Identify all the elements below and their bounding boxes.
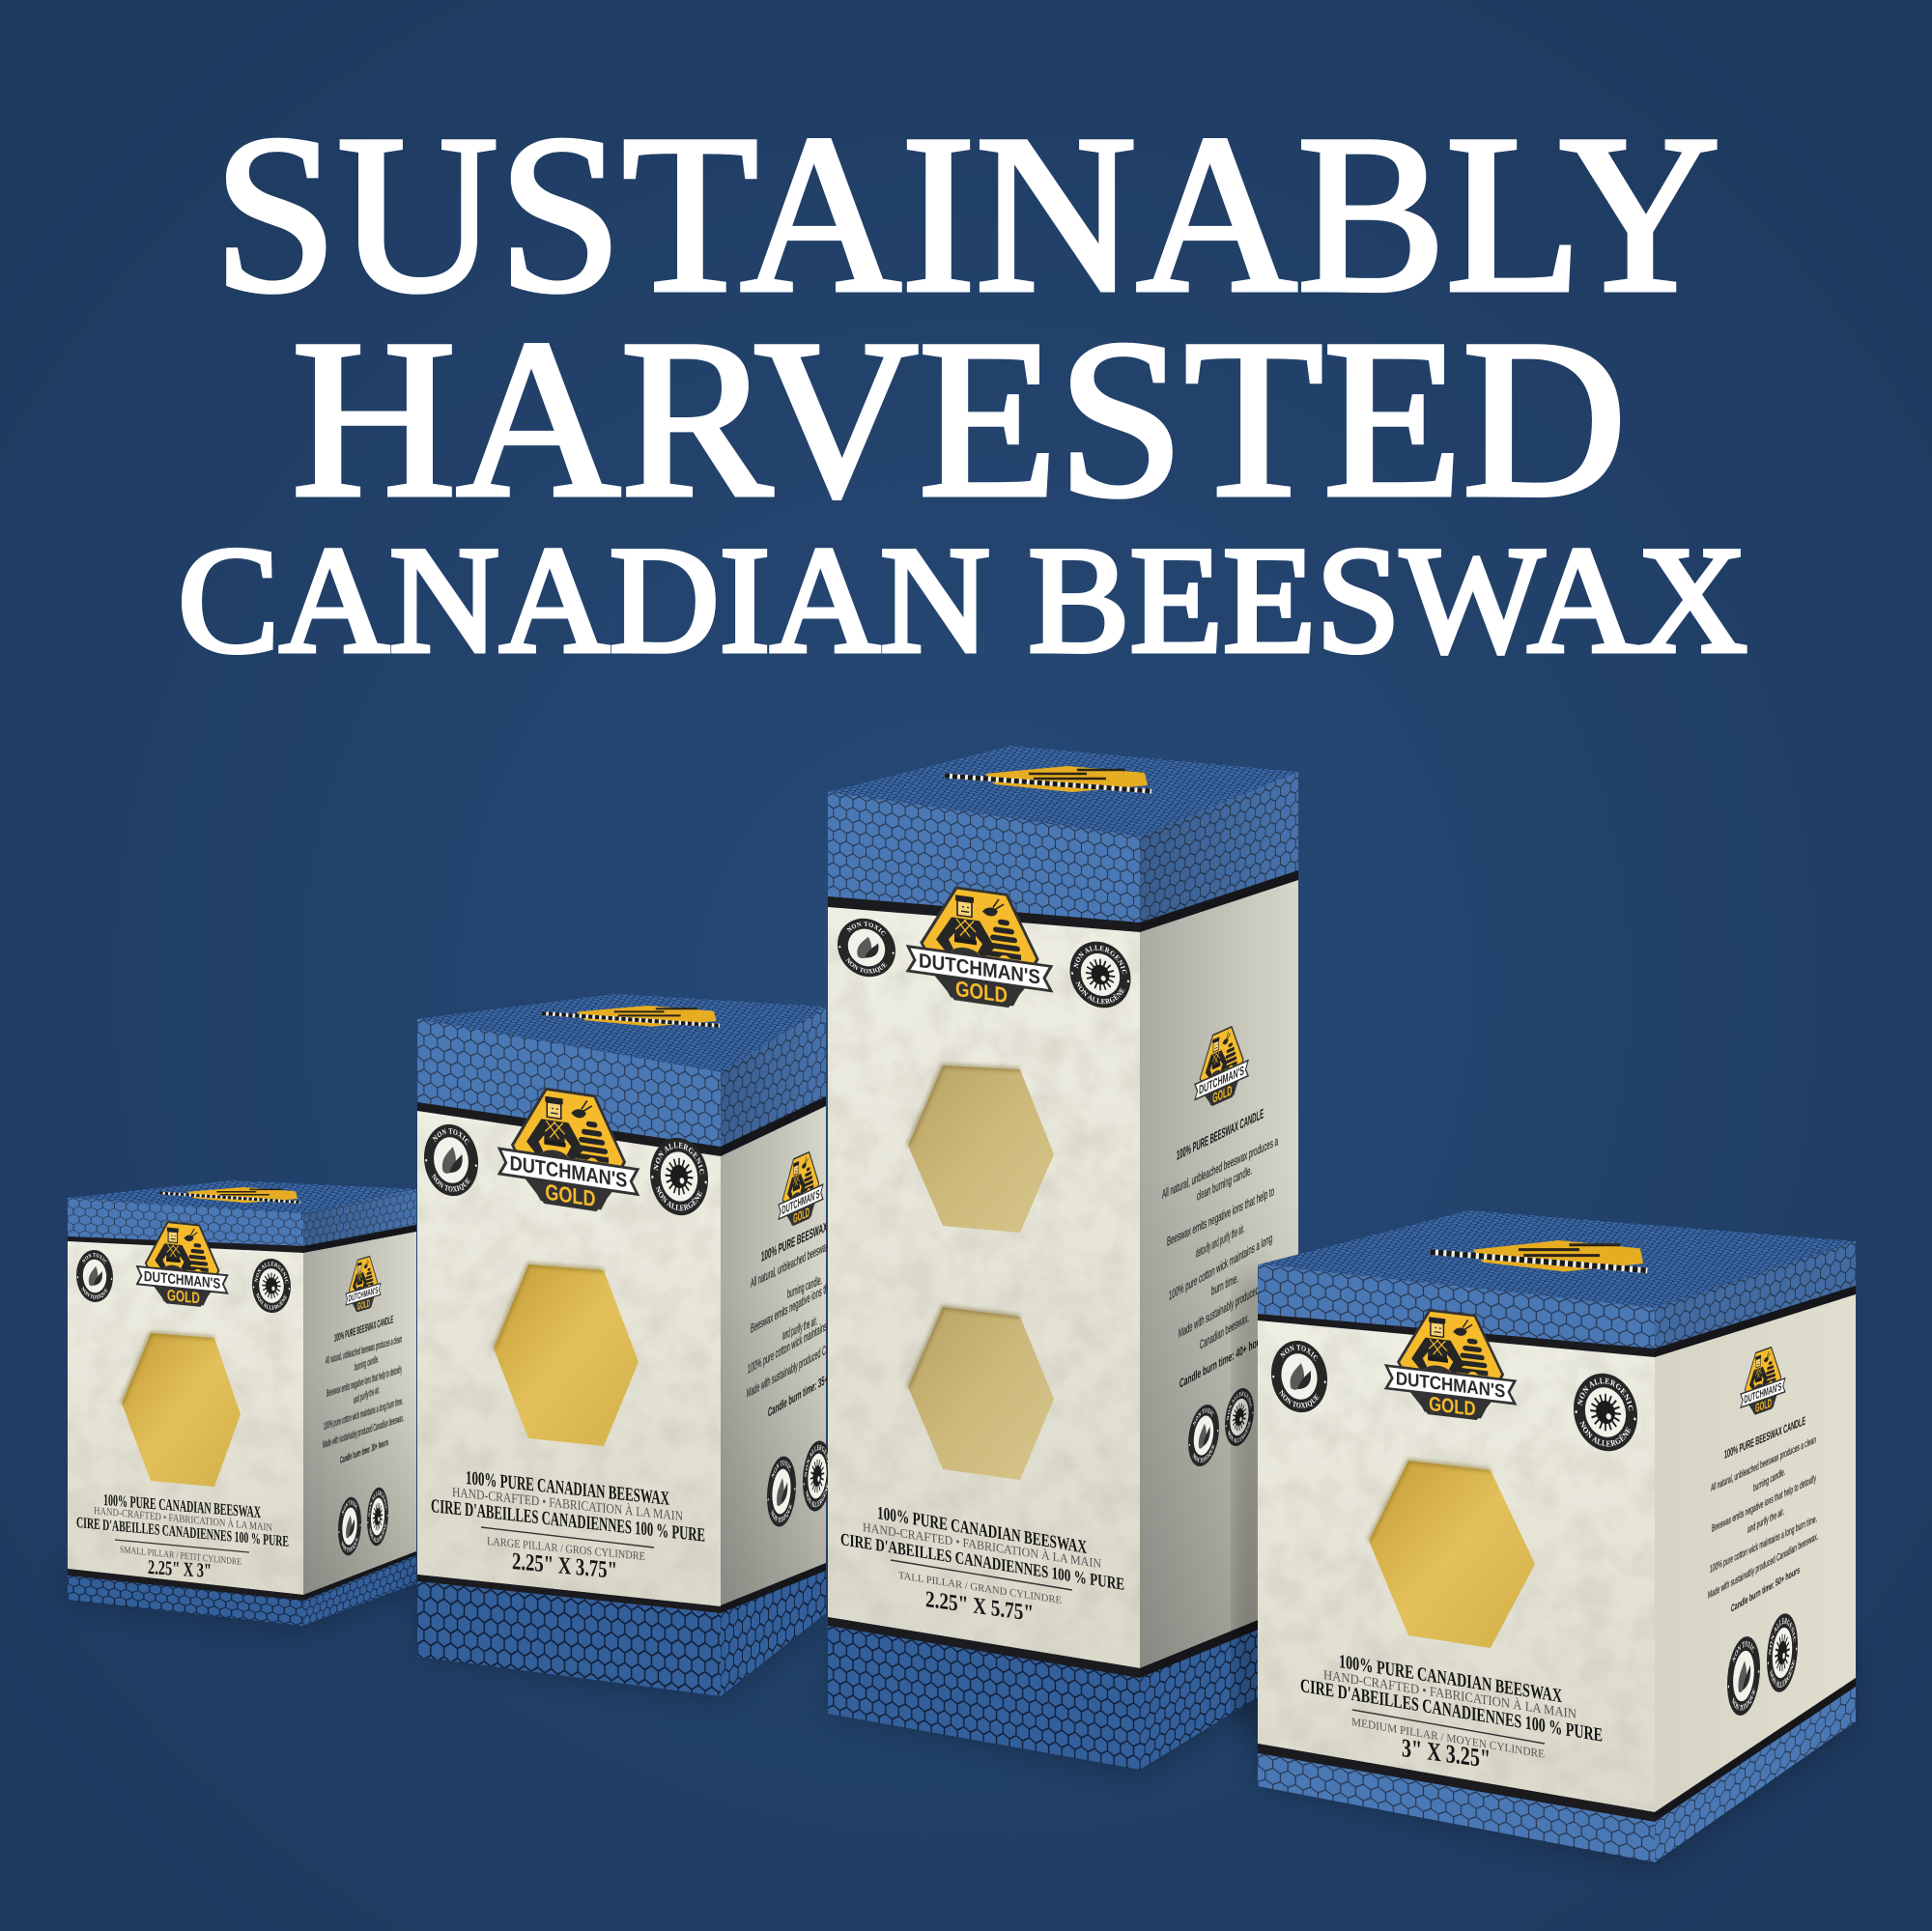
side description: detoxify and purify the air.	[1196, 1220, 1244, 1261]
logo	[908, 881, 1051, 1013]
side badge: non toxic	[338, 1493, 361, 1559]
front label text: CIRE D'ABEILLES CANADIENNES 100 % PURE	[1300, 1675, 1603, 1746]
badge: non toxic	[424, 1122, 478, 1199]
front face	[828, 792, 1140, 1770]
side logo: DUTCHMAN'S	[349, 1285, 378, 1304]
right face: Beeswax emits negative ions that help to detoxify	[1712, 1473, 1816, 1535]
heading line: harvested: HARVESTED	[292, 293, 1627, 544]
badge: non allergenic	[1574, 1370, 1637, 1455]
badge: non allergenic: NON ALLERGENIC	[255, 1262, 288, 1284]
heading line: sustainably: SUSTAINABLY	[213, 88, 1720, 339]
side description: Canadian beeswax.	[1200, 1310, 1249, 1352]
front label text: 2.25" X 3.75"	[512, 1548, 617, 1584]
icon: wax window upper	[908, 1065, 1054, 1233]
text: All natural, unbleached beeswax produces a clean	[751, 1218, 871, 1291]
box: medium pillar	[1236, 1210, 1856, 1869]
side description: 100% PURE BEESWAX CANDLE	[761, 1207, 854, 1265]
badge: non allergenic: NON ALLERGÈNE	[655, 1185, 702, 1211]
right face: All natural, unbleached beeswax produces a	[1162, 1134, 1278, 1202]
side description: burning candle.	[1753, 1466, 1785, 1494]
side badge: non allergenic: NON ALLERGÈNE	[1770, 1660, 1795, 1688]
icon: wax window	[122, 1333, 241, 1487]
side badge: non allergenic	[1767, 1606, 1798, 1699]
icon: wax window	[1369, 1461, 1535, 1648]
badge: non allergenic: NON ALLERGÈNE	[1076, 981, 1124, 1005]
badge: non toxic	[76, 1250, 113, 1302]
front label text: 2.25" X 5.75"	[925, 1587, 1034, 1627]
side badge: non allergenic: NON ALLERGÈNE	[1227, 1420, 1251, 1443]
badge: non toxic	[838, 916, 895, 980]
side badge: non toxic: NON TOXIC	[771, 1461, 791, 1479]
logo: GOLD	[955, 976, 1008, 1008]
front label text: CIRE D'ABEILLES CANADIENNES 100 % PURE	[840, 1529, 1124, 1594]
side description: clean burning candle.	[1197, 1163, 1252, 1204]
icon: wax window lower	[908, 1307, 1054, 1480]
badge: non allergenic: NON ALLERGENIC	[1073, 945, 1126, 974]
side logo	[1741, 1343, 1785, 1421]
badge: non toxic: NON TOXIQUE	[846, 957, 887, 974]
front face	[417, 1019, 721, 1696]
right face: 100% pure cotton wick maintains a long burn time.	[1710, 1514, 1817, 1576]
text: 100% pure cotton wick maintains a long burn time.	[324, 1396, 403, 1433]
side logo: DUTCHMAN'S	[1744, 1380, 1781, 1406]
front label text: HAND-CRAFTED • FABRICATION À LA MAIN	[1323, 1666, 1577, 1722]
badge: non allergenic: NON ALLERGÈNE	[1579, 1420, 1631, 1447]
front label text: 100% PURE CANADIAN BEESWAX	[1339, 1651, 1562, 1707]
side description: 100% PURE BEESWAX CANDLE	[1724, 1414, 1805, 1462]
side badge: non allergenic: NON ALLERGENIC	[1227, 1391, 1252, 1420]
badge: non toxic: NON TOXIQUE	[81, 1287, 108, 1299]
side badge: non toxic: NON TOXIC	[1193, 1408, 1214, 1426]
logo	[1386, 1305, 1515, 1425]
front label text: TALL PILLAR / GRAND CYLINDRE	[898, 1570, 1062, 1606]
side badge: non allergenic: NON ALLERGÈNE	[369, 1522, 386, 1543]
side logo: GOLD	[793, 1206, 810, 1227]
text: 100% pure cotton wick maintains a long burn time.	[748, 1295, 868, 1377]
logo: GOLD	[167, 1288, 200, 1308]
side logo: DUTCHMAN'S	[781, 1188, 820, 1218]
side description: Candle burn time: 50+ hours	[1731, 1565, 1800, 1615]
front label text: 100% PURE CANADIAN BEESWAX	[877, 1503, 1087, 1558]
side logo	[779, 1146, 823, 1234]
logo: GOLD	[1429, 1392, 1476, 1421]
logo: DUTCHMAN'S	[1396, 1368, 1505, 1403]
top face	[1259, 1210, 1856, 1308]
side badge: non toxic: NON TOXIC	[342, 1500, 357, 1515]
side badge: non allergenic: NON ALLERGENIC	[368, 1491, 387, 1517]
badge: non toxic: NON TOXIC	[846, 922, 886, 936]
front label text: 100% PURE CANADIAN BEESWAX	[466, 1467, 669, 1510]
shadow	[417, 1546, 826, 1702]
badge: non allergenic: NON ALLERGÈNE	[255, 1292, 287, 1310]
front label text: HAND-CRAFTED • FABRICATION À LA MAIN	[452, 1484, 683, 1524]
side badge: non toxic: NON TOXIQUE	[1192, 1443, 1215, 1462]
right face: 100% PURE BEESWAX CANDLE	[334, 1314, 393, 1345]
side description: and purify the air.	[354, 1384, 380, 1406]
side description	[323, 1314, 404, 1466]
front label text: MEDIUM PILLAR / MOYEN CYLINDRE	[1351, 1715, 1545, 1761]
side description: Candle burn time: 35+ hours	[768, 1361, 845, 1420]
badge: non allergenic	[252, 1259, 291, 1313]
side logo: GOLD	[1212, 1082, 1232, 1107]
side description: Candle burn time: 40+ hours	[1179, 1330, 1266, 1391]
badge: non allergenic: NON ALLERGENIC	[1577, 1377, 1634, 1410]
text: Beeswax emits negative ions that help to detoxify	[751, 1257, 871, 1336]
shadow	[68, 1546, 416, 1633]
box: large pillar	[417, 994, 871, 1702]
front label text	[431, 1467, 705, 1584]
front face	[68, 1198, 303, 1626]
side badge: non toxic: NON TOXIC	[1732, 1640, 1754, 1663]
side description	[1162, 1107, 1278, 1391]
side logo: DUTCHMAN'S	[1199, 1065, 1244, 1098]
badge: non toxic: NON TOXIQUE	[1279, 1389, 1320, 1408]
logo	[137, 1219, 227, 1310]
side badge: non allergenic: NON ALLERGÈNE	[806, 1483, 828, 1507]
side description: burn time.	[1211, 1270, 1238, 1298]
right face	[303, 1189, 416, 1626]
side badge: non allergenic	[803, 1435, 832, 1517]
badge: non toxic: NON TOXIC	[82, 1253, 107, 1264]
badge: non allergenic	[650, 1135, 708, 1218]
side description	[747, 1207, 871, 1420]
side badge: non toxic: NON TOXIQUE	[341, 1536, 357, 1552]
right face	[1655, 1241, 1856, 1862]
front label text	[840, 1503, 1124, 1627]
front label text: 2.25" X 3"	[148, 1555, 212, 1582]
logo: DUTCHMAN'S	[144, 1269, 221, 1292]
side badge: non allergenic: NON ALLERGENIC	[804, 1445, 828, 1478]
top face	[68, 1180, 416, 1213]
right face: 100% pure cotton wick maintains a long	[1169, 1230, 1272, 1303]
side logo	[1195, 1019, 1248, 1115]
logo: DUTCHMAN'S	[510, 1151, 627, 1192]
front label text: CIRE D'ABEILLES CANADIENNES 100 % PURE	[76, 1515, 289, 1550]
logo: GOLD	[545, 1179, 595, 1211]
top face	[417, 994, 826, 1072]
front face	[1258, 1264, 1655, 1862]
front label text: LARGE PILLAR / GROS CYLINDRE	[487, 1534, 645, 1563]
text: Made with sustainably produced Canadian beeswax.	[747, 1320, 867, 1401]
shadow	[1236, 1265, 1856, 1869]
icon: wax window	[494, 1264, 639, 1446]
side description: and purify the air.	[1747, 1506, 1784, 1536]
logo: DUTCHMAN'S	[919, 950, 1040, 988]
front label text: HAND-CRAFTED • FABRICATION À LA MAIN	[94, 1505, 272, 1534]
side description: burning candle.	[355, 1353, 379, 1374]
side badge: non allergenic	[1225, 1381, 1254, 1453]
text: Made with sustainably produced Canadian beeswax.	[323, 1412, 404, 1451]
side description: and purify the air.	[782, 1314, 817, 1343]
box: small pillar	[66, 1150, 446, 1634]
side badge: non toxic: NON TOXIQUE	[771, 1503, 792, 1522]
badge: non allergenic	[1070, 937, 1130, 1012]
front label text: 3" X 3.25"	[1402, 1733, 1491, 1774]
badge: non toxic: NON TOXIQUE	[431, 1173, 470, 1192]
badge: non toxic	[1271, 1338, 1327, 1415]
side badge: non toxic	[767, 1451, 796, 1532]
front label text	[76, 1491, 289, 1582]
right face	[1140, 772, 1298, 1770]
front label text: CIRE D'ABEILLES CANADIENNES 100 % PURE	[431, 1495, 705, 1547]
side description: burning candle.	[787, 1272, 822, 1301]
heading line: canadian beeswax: CANADIAN BEESWAX	[178, 516, 1747, 685]
right face	[721, 1007, 871, 1696]
side description: Made with sustainably produced	[1179, 1282, 1259, 1341]
right face: All natural, unbleached beeswax produces a clean	[1711, 1434, 1816, 1494]
side badge: non toxic	[1727, 1629, 1760, 1723]
front label text: 100% PURE CANADIAN BEESWAX	[103, 1491, 261, 1521]
side badge: non toxic	[1188, 1398, 1219, 1473]
top face	[828, 746, 1298, 837]
shadow	[828, 1546, 1298, 1777]
badge: non toxic: NON TOXIC	[1280, 1345, 1318, 1361]
front label text: HAND-CRAFTED • FABRICATION À LA MAIN	[863, 1519, 1102, 1571]
text: All natural, unbleached beeswax produces a clean	[326, 1334, 402, 1367]
badge: non toxic: NON TOXIC	[433, 1128, 469, 1145]
box: tall pillar	[828, 746, 1298, 1777]
side logo	[346, 1253, 381, 1316]
side badge: non allergenic	[367, 1484, 388, 1549]
front label text	[1300, 1651, 1603, 1774]
badge: non allergenic: NON ALLERGENIC	[653, 1142, 704, 1175]
front label text: SMALL PILLAR / PETIT CYLINDRE	[120, 1545, 242, 1568]
title	[178, 88, 1747, 685]
logo	[499, 1082, 638, 1218]
right face: Beeswax emits negative ions that help to	[1167, 1184, 1274, 1249]
side badge: non allergenic: NON ALLERGENIC	[1768, 1617, 1796, 1656]
right face: Candle burn time: 30+ hours	[340, 1437, 388, 1466]
right face: 100% PURE BEESWAX CANDLE	[1177, 1107, 1264, 1164]
side description	[1708, 1414, 1818, 1615]
side badge: non toxic: NON TOXIQUE	[1731, 1689, 1756, 1711]
side logo: GOLD	[1755, 1397, 1772, 1416]
side logo: GOLD	[357, 1296, 370, 1313]
text: Beeswax emits negative ions that help to detoxify	[327, 1364, 402, 1400]
